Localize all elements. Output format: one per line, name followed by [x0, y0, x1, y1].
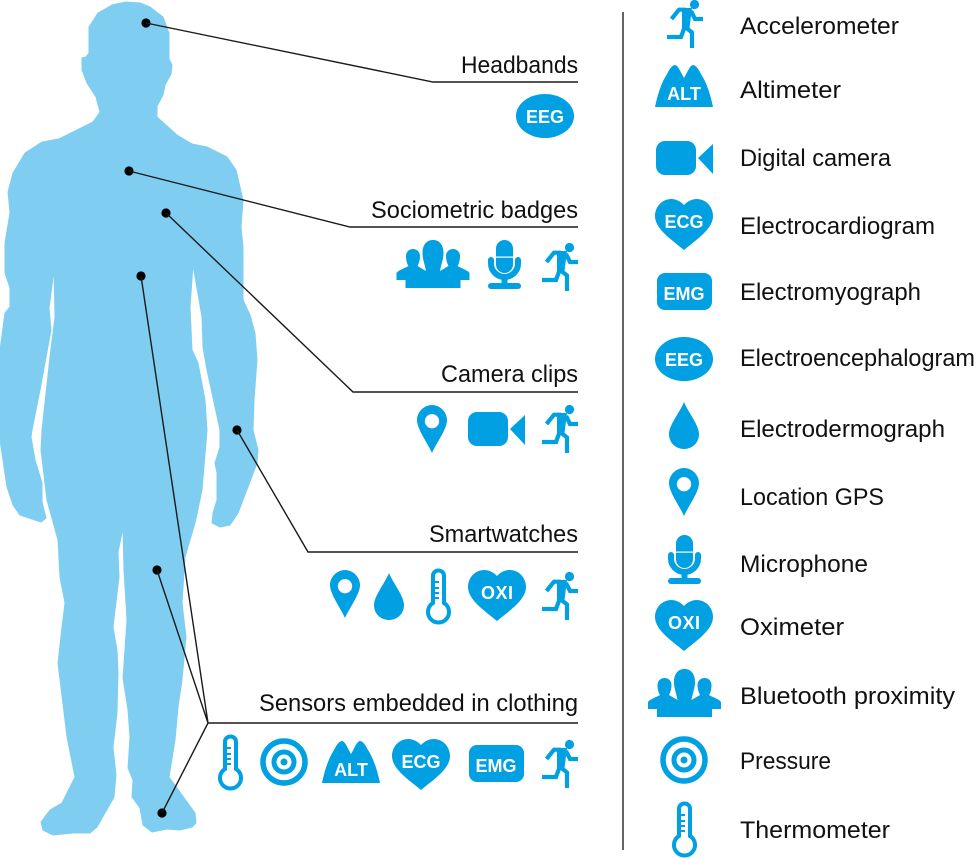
legend item: Bluetooth proximity: [648, 669, 955, 717]
icon: OXI heart: [468, 570, 526, 621]
icon: ECG heart: ECG: [401, 752, 441, 772]
icon: EMG: EMG: [475, 756, 517, 776]
heading: Smartwatches: Smartwatches: [429, 521, 578, 548]
body silhouette: [0, 2, 258, 835]
legend item: Microphone: [668, 535, 868, 584]
legend item: Electrodermograph: Electrodermograph: [740, 416, 945, 443]
icon: thermometer: [428, 570, 449, 622]
legend item: Electrocardiogram: ECG: [664, 212, 704, 232]
legend item: Electromyograph: Electromyograph: [740, 279, 921, 306]
icon: EMG: [469, 745, 524, 782]
legend item: Oximeter: Oximeter: [740, 614, 844, 641]
icon: OXI heart: OXI: [481, 583, 513, 603]
legend item: Altimeter: ALT: [667, 84, 701, 104]
icon: proximity: [396, 240, 470, 288]
legend item: Electrodermograph: [669, 402, 945, 449]
legend item: Electromyograph: [657, 273, 921, 310]
legend item: Location GPS: [669, 468, 884, 516]
icon: accelerometer: [542, 405, 578, 453]
legend item: Thermometer: Thermometer: [740, 817, 890, 844]
leader line: smartwatches: [232, 425, 578, 552]
legend item: Electrocardiogram: Electrocardiogram: [740, 213, 935, 240]
icon: EEG: EEG: [526, 107, 564, 127]
icon: accelerometer: [542, 243, 578, 291]
leader line: sociometric badges: [124, 166, 578, 227]
legend item: Electromyograph: EMG: [663, 284, 705, 304]
legend item: Accelerometer: [667, 0, 899, 48]
icon: EEG: [516, 94, 574, 138]
icon: accelerometer: [542, 740, 578, 788]
icon: microphone: [488, 240, 521, 289]
legend item: Altimeter: [655, 65, 841, 107]
legend item: Microphone: Microphone: [740, 551, 868, 578]
icon: ALT: [322, 741, 380, 783]
legend item: Accelerometer: Accelerometer: [740, 13, 899, 40]
legend item: Oximeter: [655, 600, 844, 651]
heading: Camera clips: Camera clips: [441, 361, 578, 388]
legend item: Digital camera: Digital camera: [740, 145, 892, 172]
legend item: Bluetooth proximity: Bluetooth proximity: [740, 683, 955, 710]
legend item: Thermometer: [674, 804, 890, 855]
leader line: headbands: [141, 18, 578, 82]
legend: sensor list: [648, 0, 975, 855]
legend item: Oximeter: OXI: [668, 613, 700, 633]
legend item: Electrocardiogram: [655, 199, 935, 250]
legend item: Pressure: Pressure: [740, 748, 831, 775]
legend item: Location GPS: Location GPS: [740, 484, 884, 511]
legend item: Digital camera: [656, 141, 892, 175]
icon: ECG heart: [392, 739, 450, 790]
icon: GPS pin: [330, 570, 360, 618]
icon: camera: [468, 412, 525, 446]
heading: Sociometric badges: Sociometric badges: [371, 197, 578, 224]
icon: drop: [374, 573, 404, 620]
icon: thermometer: [220, 736, 241, 788]
heading: Sensors embedded in clothing: Sensors embedded in clothing: [259, 690, 578, 717]
legend item: Electroencephalogram: [655, 337, 975, 381]
heading: Headbands: Headbands: [461, 52, 578, 79]
icon: ALT: ALT: [334, 760, 368, 780]
legend item: Electroencephalogram: Electroencephalogram: [740, 345, 975, 372]
icon: pressure: [263, 741, 305, 783]
icon: accelerometer: [542, 572, 578, 620]
icon: GPS pin: [417, 405, 447, 453]
leader line: camera clips: [161, 208, 578, 392]
legend item: Altimeter: Altimeter: [740, 77, 841, 104]
leader lines: clothing sensors: [136, 271, 578, 818]
divider: [622, 12, 624, 850]
legend item: Pressure: [663, 739, 831, 781]
legend item: Electroencephalogram: EEG: [665, 350, 703, 370]
